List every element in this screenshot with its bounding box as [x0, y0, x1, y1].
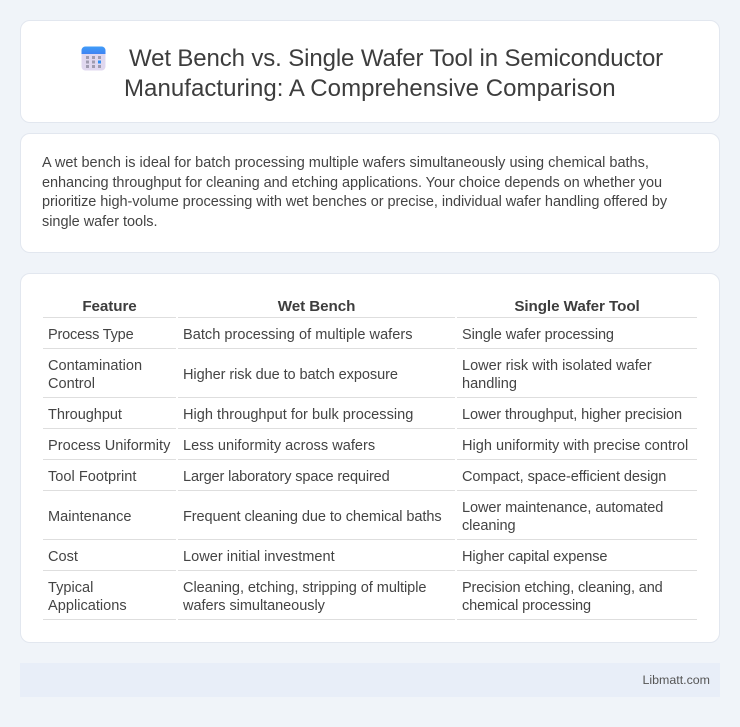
comparison table: High uniformity with precise control [462, 438, 688, 454]
comparison table: Maintenance [48, 509, 132, 525]
column headers: Single Wafer Tool [514, 298, 640, 315]
comparison table: High throughput for bulk processing [183, 407, 413, 423]
comparison table: Cost [48, 549, 78, 565]
comparison table: Larger laboratory space required [183, 469, 390, 485]
intro text: enhancing throughput for cleaning and etching applications. Your choice depends on whether you [42, 175, 662, 191]
comparison table: Less uniformity across wafers [183, 438, 375, 454]
comparison table: Lower initial investment [183, 549, 335, 565]
intro text [42, 155, 668, 230]
intro text: single wafer tools. [42, 214, 158, 230]
comparison table: Higher risk due to batch exposure [183, 367, 398, 383]
comparison table: Applications [48, 598, 127, 614]
column headers [82, 298, 640, 315]
comparison table: Lower maintenance, automated [462, 500, 663, 516]
panel: comparison table [20, 273, 720, 643]
comparison table: Frequent cleaning due to chemical baths [183, 509, 442, 525]
comparison table [43, 298, 697, 620]
comparison table: Cleaning, etching, stripping of multiple [183, 580, 426, 596]
comparison table: Lower throughput, higher precision [462, 407, 682, 423]
comparison table: Process Type [48, 327, 133, 343]
comparison table: Single wafer processing [462, 327, 614, 343]
comparison table: cleaning [462, 518, 515, 534]
panel: title card [20, 20, 720, 123]
title: Wet Bench vs. Single Wafer Tool in Semiconductor [129, 45, 663, 72]
comparison table: Compact, space-efficient design [462, 469, 666, 485]
comparison table: Contamination [48, 358, 142, 374]
comparison table: chemical processing [462, 598, 591, 614]
comparison table: wafers simultaneously [183, 598, 325, 614]
comparison table: handling [462, 376, 517, 392]
footer text: Libmatt.com [643, 673, 710, 687]
comparison table: Typical [48, 580, 93, 596]
comparison table: Process Uniformity [48, 438, 170, 454]
intro text: A wet bench is ideal for batch processing multiple wafers simultaneously using chemical baths, [42, 155, 649, 171]
column headers: Feature [82, 298, 137, 315]
title: Manufacturing: A Comprehensive Comparison [124, 74, 616, 102]
panel: introduction [20, 133, 720, 253]
comparison table: Lower risk with isolated wafer [462, 358, 652, 374]
comparison table: Control [48, 376, 95, 392]
comparison table: Precision etching, cleaning, and [462, 580, 663, 596]
icon: calendar [82, 46, 106, 70]
column headers: Wet Bench [278, 298, 355, 315]
comparison table: Batch processing of multiple wafers [183, 327, 413, 343]
title [124, 45, 663, 102]
comparison table: Tool Footprint [48, 469, 136, 485]
footer bar [20, 663, 720, 697]
intro text: prioritize high-volume processing with wet benches or precise, individual wafer handling offered by [42, 194, 667, 210]
comparison table: Higher capital expense [462, 549, 607, 565]
comparison table: Throughput [48, 407, 122, 423]
